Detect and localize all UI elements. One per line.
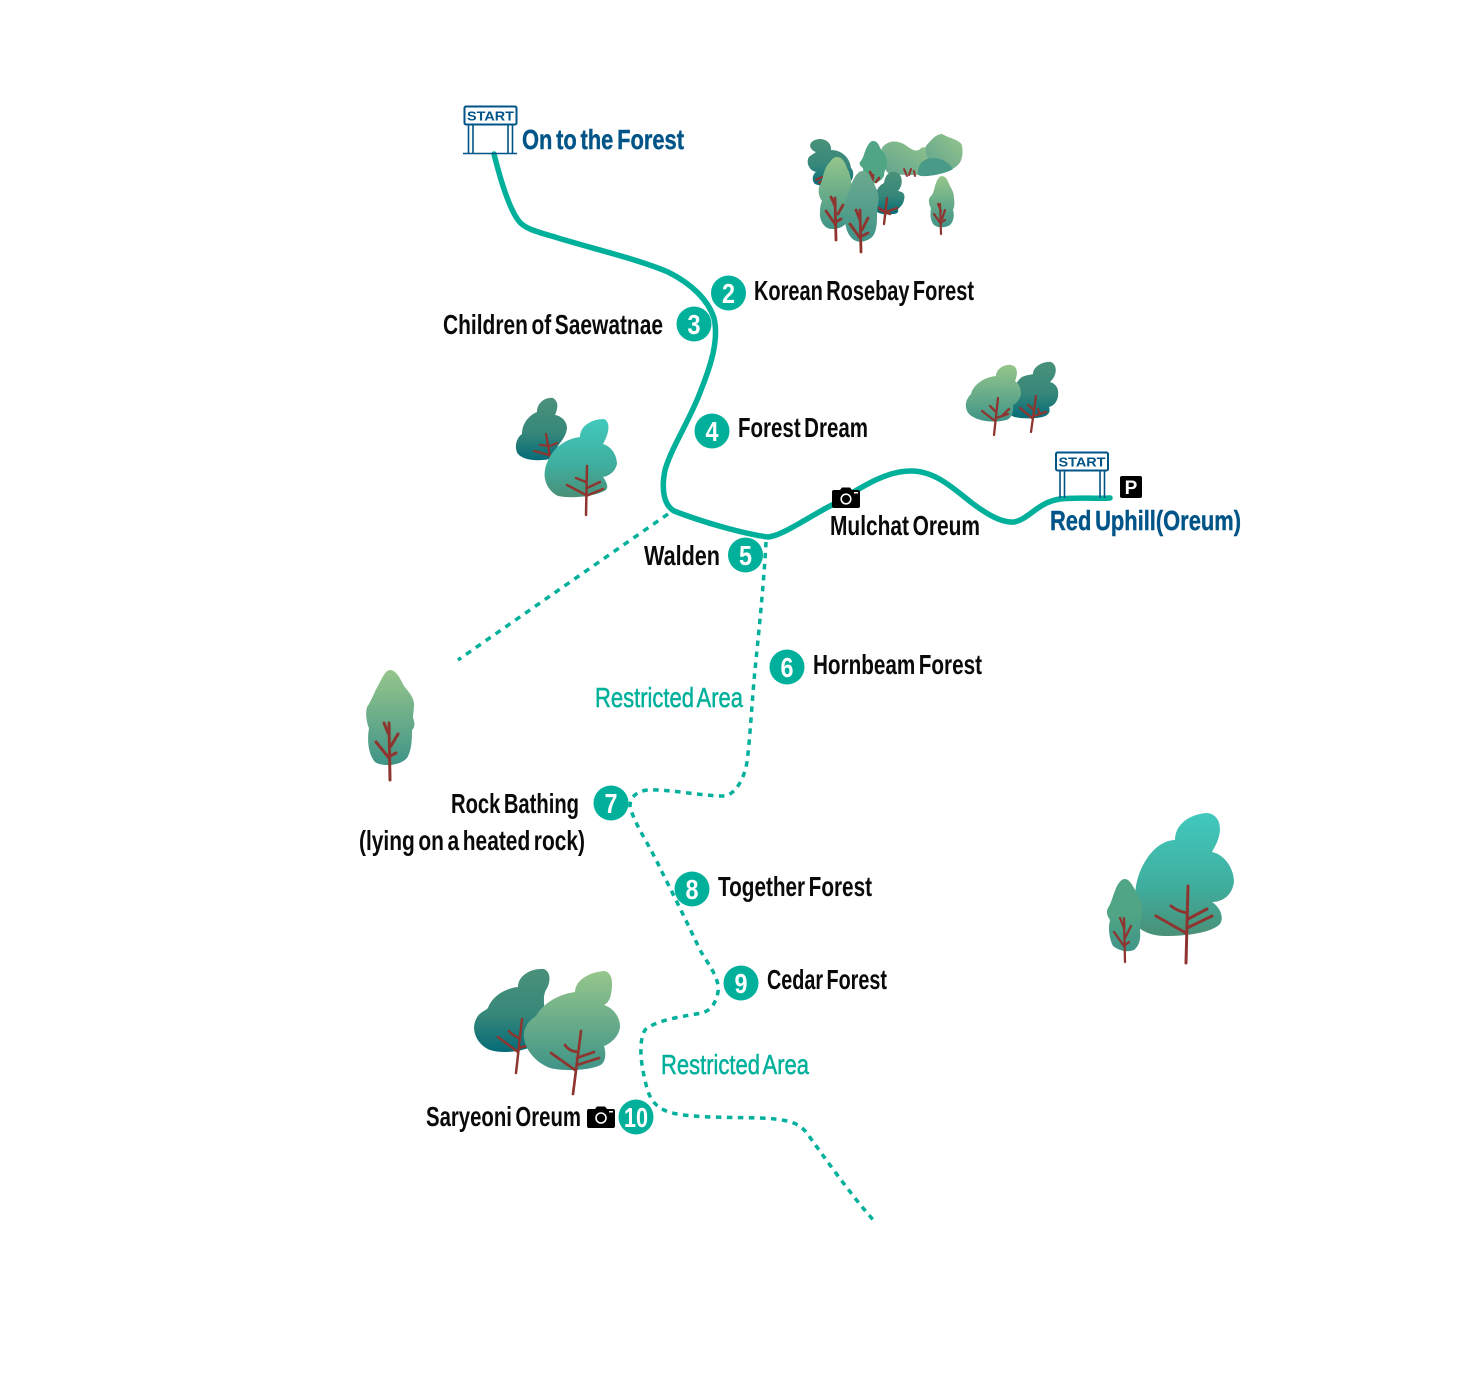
icon: camera Mulchat Oreum xyxy=(832,488,860,508)
label: Rock Bathing: Rock Bathing xyxy=(451,788,579,819)
icon: parking: P xyxy=(1125,478,1138,499)
heading: Red Uphill (Oreum): Red Uphill(Oreum) xyxy=(1050,505,1241,536)
marker 7 xyxy=(594,786,628,820)
label: Together Forest: Together Forest xyxy=(718,871,872,902)
marker 9 xyxy=(724,966,758,1000)
label: Mulchat Oreum: Mulchat Oreum xyxy=(830,510,980,541)
label: Walden: Walden xyxy=(644,540,720,571)
marker 8: 8 xyxy=(686,874,698,905)
marker 2 xyxy=(711,276,746,310)
label: Restricted Area north: Restricted Area xyxy=(595,682,743,713)
tree: tall single xyxy=(366,670,414,780)
label: Cedar Forest: Cedar Forest xyxy=(767,964,887,995)
start sign: On to the Forest: START xyxy=(467,108,514,124)
marker 2: 2 xyxy=(722,278,735,309)
label: Hornbeam Forest: Hornbeam Forest xyxy=(813,649,982,680)
heading: On to the Forest: On to the Forest xyxy=(522,124,684,155)
icon: camera Saryeoni Oreum xyxy=(587,1106,615,1128)
label: Korean Rosebay Forest: Korean Rosebay Forest xyxy=(754,275,974,306)
marker 5: 5 xyxy=(739,540,752,571)
tree cluster: top xyxy=(808,134,963,252)
marker 3: 3 xyxy=(688,309,700,340)
marker 6 xyxy=(770,650,804,684)
marker 7: 7 xyxy=(604,788,618,819)
tree pair: upper right xyxy=(966,362,1058,435)
marker 10: 10 xyxy=(624,1102,648,1133)
marker 6: 6 xyxy=(780,652,794,683)
label: Forest Dream: Forest Dream xyxy=(738,412,868,443)
tree pair: lower right xyxy=(1107,813,1234,963)
label: Saryeoni Oreum: Saryeoni Oreum xyxy=(426,1101,581,1132)
marker 5 xyxy=(728,538,763,572)
marker 4 xyxy=(694,414,730,448)
marker 4: 4 xyxy=(706,416,719,447)
route: dotted branch to the west xyxy=(458,514,668,660)
start sign: On to the Forest xyxy=(463,106,517,154)
icon: parking xyxy=(1120,476,1142,499)
label: Restricted Area south: Restricted Area xyxy=(661,1049,809,1080)
marker 9: 9 xyxy=(734,968,748,999)
tree pair: left of route xyxy=(516,398,617,515)
label: lying on a heated rock: (lying on a heated rock) xyxy=(359,825,585,856)
label: Children of Saewatnae: Children of Saewatnae xyxy=(443,309,663,340)
marker 3 xyxy=(676,306,712,342)
route: dotted trail to the south xyxy=(630,542,875,1222)
route: solid trail xyxy=(494,154,1110,537)
tree pair: above Saryeoni Oreum xyxy=(474,969,620,1094)
start sign: Red Uphill: START xyxy=(1058,454,1106,470)
marker 8 xyxy=(674,872,710,906)
start sign: Red Uphill xyxy=(1056,452,1108,498)
